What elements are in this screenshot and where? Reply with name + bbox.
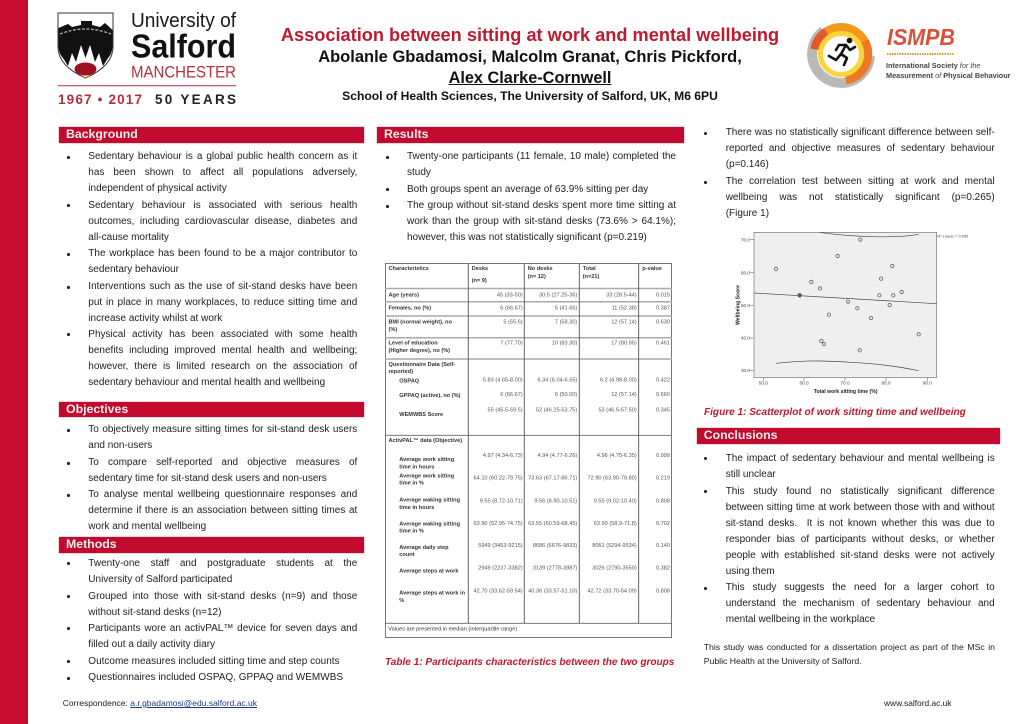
table footnote: Values are presented in median (interquartile range) <box>388 626 517 632</box>
column: p-value: 0.808 <box>656 588 670 594</box>
bullet: This study suggests the need for a larger cohort to <box>726 582 995 593</box>
column: p-value: 0.630 <box>656 319 670 325</box>
bullet: outcomes, including cardiovascular disease, diabetes and <box>88 216 357 227</box>
bullet <box>697 451 995 483</box>
row labels: Average steps at work in <box>399 591 466 597</box>
title block <box>281 25 779 102</box>
column: total: 8061 (5294-9534) <box>592 543 637 549</box>
table: participant characteristics <box>385 263 672 638</box>
row labels: ActivPAL™ data (Objective) <box>388 438 462 444</box>
column: desks: 55 (45.5-59.5) <box>488 407 523 413</box>
column: total: 6.2 (4.98-8.00) <box>600 377 637 383</box>
column: no desks: 7 (58.30) <box>555 319 577 325</box>
bullet: This study found no statistically significant difference <box>726 486 995 496</box>
bullet: reported and objective measures of sedentary behaviour <box>726 143 995 154</box>
bullet: To objectively measure sitting times for sit-stand desk users <box>88 424 357 435</box>
heading: objectives <box>59 402 364 417</box>
axis title: sitting time: Total work sitting time (%) <box>814 389 878 395</box>
bullet: put in place in many workplaces, to reduce sitting time and <box>88 297 357 308</box>
title: Association between sitting at work and mental wellbeing <box>281 25 779 45</box>
column: p-value: 0.015 <box>656 292 670 298</box>
bullet: without sit-stand desks (n=12) <box>88 606 221 618</box>
column: no desks: 3139 (2778-3887) <box>533 566 577 572</box>
bullet: The correlation test between sitting at work and mental <box>726 176 995 187</box>
bullet: has been shown to affect all populations adversely, <box>88 167 357 178</box>
bullet: University of Salford participated <box>88 574 232 585</box>
column: no desks: 73.63 (67.17-86.71) <box>528 476 577 482</box>
y axis labels: 40.0 <box>741 336 750 341</box>
column: no desks: 4.94 (4.77-6.26) <box>537 453 577 459</box>
column: total: 42.72 (33.70-54.09) <box>588 588 637 594</box>
bullet <box>59 487 357 535</box>
bullet <box>59 198 357 246</box>
row labels: Females, no (%) <box>388 306 431 312</box>
row labels: GPPAQ (active), no (%) <box>399 393 461 399</box>
data points <box>774 238 920 352</box>
bullet: increase activity whilst at work <box>88 313 222 324</box>
bullet: To analyse mental wellbeing questionnaire responses and <box>88 489 357 500</box>
bullet <box>697 580 995 628</box>
column: desks: 2949 (2237-3382) <box>478 566 523 572</box>
correspondence: Correspondence: a.r.gbadamosi@edu.salford.ac.uk <box>63 698 257 708</box>
bullet: (Figure 1) <box>726 208 769 219</box>
affiliation: School of Health Sciences, The University of Salford, UK, M6 6PU <box>342 88 718 102</box>
column: p-value: 0.382 <box>656 566 670 572</box>
bullet: Sedentary behaviour is associated with serious health <box>88 200 357 211</box>
logo: ISMPB <box>807 23 1011 88</box>
bullet: Sedentary behaviour is a global public health concern as it <box>88 151 357 162</box>
panel: background <box>58 126 365 388</box>
row labels: reported) <box>388 369 413 375</box>
decorative red strip <box>0 0 28 724</box>
presenting author: Alex Clarke-Cornwell <box>449 69 611 87</box>
icon: shield crest <box>58 13 113 78</box>
column: desks: 5949 (3453-9215) <box>478 543 523 549</box>
table header: (n=21) <box>583 274 599 280</box>
heading: conclusions <box>697 428 1000 444</box>
scatter chart <box>735 232 969 395</box>
column: p-value: 0.660 <box>656 392 670 398</box>
row labels: Average waking sitting <box>399 522 461 528</box>
column: desks <box>474 292 523 594</box>
y axis labels: 70.0 <box>741 237 750 242</box>
row labels: Average daily step <box>399 545 449 551</box>
row labels: Average steps at work <box>399 569 459 575</box>
bullet: Twenty-one staff and postgraduate students at the <box>88 558 357 569</box>
column: desks: 42.70 (33.62-59.54) <box>474 588 523 594</box>
x axis labels: 80.0 <box>881 381 891 386</box>
bullet: work than the group with sit-stand desks (73.6% > 64.1%); <box>407 216 676 227</box>
logo: University of Salford: Salford <box>131 28 236 64</box>
column: no desks: 63.55 (60.59-68.45) <box>528 521 577 527</box>
heading: background <box>59 127 364 142</box>
column: p-value: 0.140 <box>656 543 670 549</box>
dissertation note: This study was conducted for a dissertation project as part of the MSc in <box>704 642 995 652</box>
row labels: time in % <box>399 529 424 535</box>
row labels: time in hours <box>399 465 434 471</box>
column: p-value <box>656 292 670 594</box>
row labels: OSPAQ <box>399 379 420 385</box>
column: no desks: 10 (83.30) <box>552 341 577 347</box>
row labels: WEMWBS Score <box>399 412 443 418</box>
authors: Abolanle Gbadamosi, Malcolm Granat, Chris Pickford, <box>318 48 742 66</box>
heading: results <box>377 127 684 142</box>
column: desks: 63.90 (52.95-74.75) <box>474 521 523 527</box>
row labels: Average work sitting <box>399 457 455 463</box>
column: desks: 7 (77.70) <box>500 341 523 347</box>
column: total: 33 (28.5-44) <box>606 292 637 298</box>
bullet: Interventions such as the use of sit-stand desks have been <box>88 281 357 292</box>
figure caption: Figure 1: Scatterplot of work sitting time and wellbeing <box>704 406 966 418</box>
bullet: To compare self-reported and objective measures of <box>88 457 357 468</box>
column: p-value: 0.422 <box>656 377 670 383</box>
row labels: time in hours <box>399 505 434 511</box>
x axis labels: 70.0 <box>840 381 850 386</box>
bullet <box>697 174 995 222</box>
bullet <box>59 556 357 588</box>
bullet: Twenty-one participants (11 female, 10 male) completed the <box>407 151 676 162</box>
column: total: 9.55 (9.02-10.40) <box>594 498 637 504</box>
bullet: Both groups spent an average of 63.9% sitting per day <box>407 184 648 195</box>
column: no desks: 5 (41.66) <box>555 306 577 312</box>
icon: ring with runner <box>812 27 870 83</box>
x axis labels <box>759 381 932 386</box>
row labels: time in % <box>399 481 424 487</box>
logo: ISMPB: ISMPB <box>887 24 955 50</box>
column: total: 11 (52.38) <box>612 306 637 312</box>
row labels: count <box>399 552 415 558</box>
bullet: mental wellbeing in the workplace <box>726 614 875 625</box>
bullet: sedentary behaviour <box>88 264 179 275</box>
bullet: sedentary behaviour and mental health and wellbeing <box>88 377 325 388</box>
column: p-value: 0.461 <box>656 341 670 347</box>
bullet: independent of physical activity <box>88 183 227 194</box>
bullet: sedentary time for sit-stand desk users and non-users <box>88 473 327 484</box>
bullet: Grouped into those with sit-stand desks (n=9) and those <box>88 590 357 602</box>
table header: (n= 12) <box>528 274 546 280</box>
column: total: 63.90 (58.9-71.8) <box>594 521 637 527</box>
column: total: 12 (57.14) <box>611 319 637 325</box>
bullet: understand the mechanism of sedentary behaviour and <box>726 598 995 609</box>
logo: University of Salford: 1967 • 2017 <box>58 92 142 107</box>
bullet: benefits including improved mental health and wellbeing; <box>88 345 357 356</box>
bullet: filled out a daily activity diary <box>88 639 215 650</box>
table header: p-value <box>642 266 662 272</box>
column: desks: 64.10 (60.22-79.75) <box>474 476 523 482</box>
y axis labels: 60.0 <box>741 270 750 275</box>
row labels: Level of education <box>388 341 438 347</box>
row labels: BMI (normal weight), no <box>388 319 452 325</box>
column: total: 4.96 (4.75-6.35) <box>597 453 637 459</box>
table header: Characteristics <box>388 266 429 272</box>
bullet <box>59 246 357 278</box>
panel: results <box>376 126 685 243</box>
column: p-value: 0.387 <box>656 306 670 312</box>
bullet: all-cause mortality <box>88 232 169 243</box>
bullet: people with established sit-stand desks were not actively <box>726 550 995 560</box>
column: p-value: 0.999 <box>656 453 670 459</box>
bullet: Physical activity has been associated with some health <box>88 329 357 340</box>
panel: conclusions <box>696 427 1001 625</box>
column: total <box>588 292 637 594</box>
bullet <box>59 327 357 391</box>
y axis labels: 30.0 <box>741 368 750 373</box>
website: www.salford.ac.uk <box>884 698 952 708</box>
bullet: Participants wore an activPAL™ device for seven days and <box>88 623 357 634</box>
bullet: There was no statistically significant difference between self- <box>726 127 995 138</box>
table header <box>388 266 662 284</box>
column: total: 53 (46.5-57.50) <box>598 407 637 413</box>
row labels: % <box>399 598 404 604</box>
bullet: using them <box>726 566 775 576</box>
table caption: Table 1: Participants characteristics between the two groups <box>385 657 674 668</box>
column: desks: 6 (66.67) <box>500 306 523 312</box>
column: desks: 9.55 (8.72-10.71) <box>480 498 523 504</box>
x axis labels: 60.0 <box>799 381 809 386</box>
table header: No desks <box>528 266 553 272</box>
heading: results: Results <box>384 127 428 141</box>
y axis labels <box>741 237 750 373</box>
column: total: 72.90 (63.90-79.80) <box>588 476 637 482</box>
logo: University of Salford: University of <box>131 9 236 32</box>
column: total: 17 (80.95) <box>611 341 637 347</box>
heading: conclusions: Conclusions <box>704 428 777 442</box>
panel: results continued <box>704 127 995 219</box>
table header: Desks <box>472 266 488 272</box>
column: total: 3026 (2790-3550) <box>592 566 637 572</box>
logo: University of Salford: 50 YEARS <box>155 92 236 107</box>
column: no desks: 6 (50.00) <box>555 392 577 398</box>
row labels: Average waking sitting <box>399 497 461 503</box>
heading: objectives: Objectives <box>66 402 128 416</box>
column: desks: 5 (55.6) <box>503 319 523 325</box>
logo: University of Salford <box>58 9 236 107</box>
bullet: The group without sit-stand desks spent more time sitting at <box>407 200 676 211</box>
column: p-value: 0.219 <box>656 476 670 482</box>
bullet <box>59 149 357 197</box>
table header: (n= 9) <box>472 278 487 284</box>
bullet: between sitting time at work between those with and without <box>726 502 995 512</box>
x axis labels: 90.0 <box>923 381 932 386</box>
row labels: Questionnaire Data (Self- <box>388 362 455 368</box>
y axis labels: 50.0 <box>741 303 750 308</box>
fit line and confidence bands <box>754 232 937 371</box>
bullet: The impact of sedentary behaviour and mental wellbeing is <box>726 453 995 464</box>
column: p-value: 0.345 <box>656 407 670 413</box>
bullet: work and mental wellbeing <box>88 521 206 532</box>
logo: ISMPB: International Society for the <box>886 61 980 70</box>
column: desks: 6 (66.67) <box>500 392 523 398</box>
bullet: however, there is limited research on the association of <box>88 361 357 372</box>
bullet: wellbeing was not statistically significant (p=0.265) <box>726 192 995 203</box>
table header: Total <box>583 266 596 272</box>
bullet: The workplace has been found to be a major contributor to <box>88 248 357 259</box>
row labels <box>388 292 466 604</box>
column: p-value: 0.702 <box>656 521 670 527</box>
row labels: (Higher degree), no (%) <box>388 348 450 354</box>
column: no desks: 40.36 (33.57-51.10) <box>528 588 577 594</box>
column: desks: 45 (33-50) <box>497 292 523 298</box>
bullet: responder bias of participants without desks, or whether <box>726 534 995 544</box>
r squared note: R² Linear = 0.006 <box>937 233 969 238</box>
row labels: Average work sitting <box>399 474 455 480</box>
bullet: determine if there is an association between sitting times at <box>88 505 357 516</box>
column: desks: 5.83 (4.65-8.00) <box>483 377 523 383</box>
bullet: still unclear <box>726 469 776 480</box>
column: p-value: 0.808 <box>656 498 670 504</box>
logo: University of Salford: MANCHESTER <box>131 62 236 82</box>
bullet <box>377 149 676 181</box>
column: desks: 4.97 (4.34-6.73) <box>483 453 523 459</box>
bullet <box>59 279 357 327</box>
bullet: study <box>407 167 431 178</box>
dissertation note: Public Health at the University of Salford. <box>704 656 862 666</box>
bullet <box>697 484 995 580</box>
heading: methods: Methods <box>66 537 117 551</box>
column: no desks: 6.34 (6.04-6.55) <box>537 377 577 383</box>
axis title: wellbeing score: Wellbeing Score <box>735 285 741 325</box>
bullet <box>59 588 357 620</box>
bullet <box>377 198 676 246</box>
row labels: Age (years) <box>388 292 419 298</box>
dissertation note <box>704 642 995 666</box>
bullet: and non-users <box>88 440 152 451</box>
column: no desks: 8686 (6676-9833) <box>533 543 577 549</box>
heading: background: Background <box>66 127 138 141</box>
bullet: Outcome measures included sitting time and step counts <box>88 656 340 666</box>
column: total: 12 (57.14) <box>611 392 637 398</box>
bullet: (p=0.146) <box>726 159 769 170</box>
bullet <box>59 422 357 454</box>
column: no desks: 52 (46.25-53.75) <box>536 407 577 413</box>
bullet: however, this was not statistically significant (p=0.219) <box>407 232 647 243</box>
x axis labels: 50.0 <box>759 381 768 386</box>
panel: methods <box>58 536 365 683</box>
bullet <box>59 621 357 653</box>
bullet: Questionnaires included OSPAQ, GPPAQ and WEMWBS <box>88 672 343 683</box>
bullet: sit-stand desks. It is not known whether this was due to <box>726 518 995 528</box>
column: no desks: 30.5 (27.25-36) <box>539 292 577 298</box>
row labels: (%) <box>388 327 397 333</box>
column: no desks <box>528 292 577 594</box>
logo: ISMPB: Measurement of Physical Behaviour <box>886 71 1011 80</box>
bullet <box>59 455 357 487</box>
bullet <box>697 125 995 173</box>
column: no desks: 9.56 (8.90-10.51) <box>534 498 577 504</box>
heading: methods <box>59 537 364 552</box>
panel: objectives <box>58 401 365 532</box>
